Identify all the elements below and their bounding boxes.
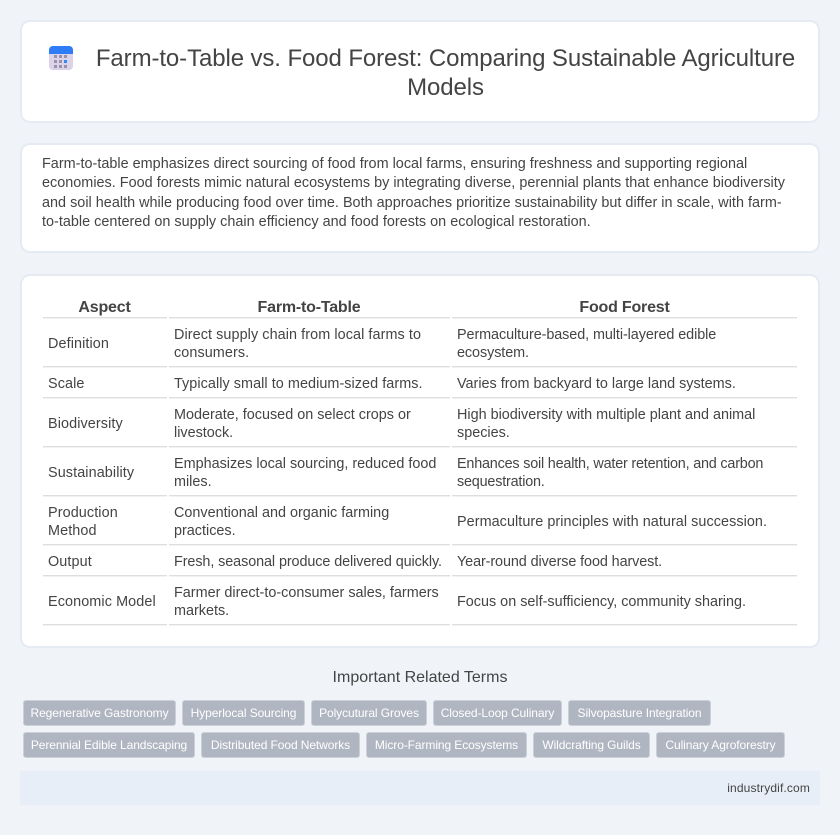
tag (433, 700, 562, 726)
text block: intro: and soil health while producing food over time. Both approaches prioritize sustainability but differ in scale, with farm- (42, 195, 782, 211)
tag (656, 732, 785, 758)
comparison table: species. (457, 425, 510, 441)
tag: Silvopasture Integration (578, 706, 701, 720)
comparison table: miles. (174, 474, 212, 490)
comparison table: Farmer direct-to-consumer sales, farmers (174, 585, 439, 601)
title (96, 45, 795, 101)
panel: intro text (20, 143, 820, 253)
row: Production Method (48, 505, 118, 539)
text block: intro: to-table centered on supply chain efficiency and food forests on ecological restoration. (42, 214, 591, 230)
row: Output: Output (48, 554, 92, 570)
comparison table: Direct supply chain from local farms to (174, 327, 421, 343)
footer bar (20, 771, 820, 805)
icon: calendar (49, 46, 73, 70)
tag: Regenerative Gastronomy (30, 706, 168, 720)
comparison table: Varies from backyard to large land systems. (457, 376, 736, 392)
comparison table: Moderate, focused on select crops or (174, 407, 411, 423)
comparison table (43, 299, 797, 626)
comparison table: consumers. (174, 345, 249, 361)
text block: intro: Farm-to-table emphasizes direct sourcing of food from local farms, ensuring freshness and supporting regional (42, 156, 747, 172)
panel: comparison table (20, 274, 820, 648)
comparison table: Permaculture-based, multi-layered edible (457, 327, 716, 343)
tag (533, 732, 650, 758)
text block: intro (42, 156, 785, 230)
tag (311, 700, 427, 726)
title: Models (407, 74, 484, 101)
panel: header card (20, 20, 820, 123)
footer source text: industrydif.com (727, 781, 810, 795)
row: Scale: Scale (48, 376, 84, 392)
tag (182, 700, 305, 726)
comparison table: Permaculture principles with natural succession. (457, 514, 767, 530)
column header: Aspect: Aspect (78, 299, 131, 316)
comparison table: practices. (174, 523, 236, 539)
comparison table: ecosystem. (457, 345, 529, 361)
comparison table: Year-round diverse food harvest. (457, 554, 662, 570)
tag: Micro-Farming Ecosystems (375, 738, 518, 752)
tag: Hyperlocal Sourcing (191, 706, 296, 720)
tag (201, 732, 360, 758)
row: Production Method: Method (48, 523, 97, 539)
comparison table: Focus on self-sufficiency, community sharing. (457, 594, 746, 610)
comparison table: Fresh, seasonal produce delivered quickly. (174, 554, 442, 570)
tag (23, 700, 176, 726)
comparison table: High biodiversity with multiple plant and animal (457, 407, 755, 423)
tag: Distributed Food Networks (211, 738, 350, 752)
tag list (23, 700, 785, 758)
comparison table: Typically small to medium-sized farms. (174, 376, 423, 392)
row: Sustainability: Sustainability (48, 465, 134, 481)
comparison table: livestock. (174, 425, 233, 441)
comparison table: sequestration. (457, 474, 545, 490)
tag: Wildcrafting Guilds (542, 738, 641, 752)
comparison table: markets. (174, 603, 229, 619)
tag (23, 732, 195, 758)
row: Economic Model: Economic Model (48, 594, 156, 610)
tag (568, 700, 711, 726)
comparison table: Emphasizes local sourcing, reduced food (174, 456, 436, 472)
row: Biodiversity: Biodiversity (48, 416, 123, 432)
row: Definition: Definition (48, 336, 109, 352)
column header: Farm-to-Table: Farm-to-Table (258, 299, 360, 316)
tag: Closed-Loop Culinary (441, 706, 554, 720)
comparison table: Enhances soil health, water retention, and carbon (457, 456, 763, 472)
row: Production Method: Production (48, 505, 118, 521)
text block: intro: economies. Food forests mimic natural ecosystems by integrating diverse, perennial plants that enhance biodiversity (42, 175, 785, 191)
column header: Food Forest: Food Forest (579, 299, 670, 316)
tag: Polycutural Groves (319, 706, 419, 720)
tag: Perennial Edible Landscaping (31, 738, 187, 752)
tag: Culinary Agroforestry (665, 738, 776, 752)
heading: related terms: Important Related Terms (333, 669, 507, 686)
tag (366, 732, 527, 758)
title: Farm-to-Table vs. Food Forest: Comparing Sustainable Agriculture (96, 45, 795, 72)
comparison table: Conventional and organic farming (174, 505, 389, 521)
